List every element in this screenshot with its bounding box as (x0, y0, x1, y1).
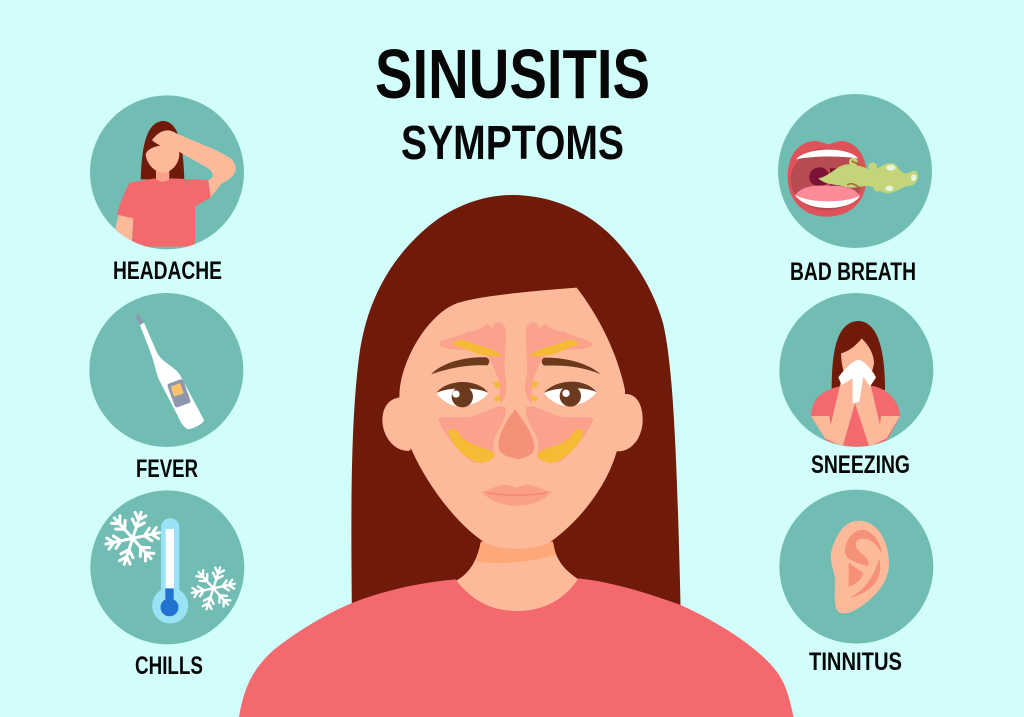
symptom: chills (90, 490, 244, 680)
icon: ear (779, 490, 933, 644)
hair (351, 195, 681, 625)
icon: thermometer and snowflakes (90, 490, 244, 644)
symptom: headache (90, 95, 244, 285)
sinuses: left side (438, 322, 507, 463)
snowflake large (99, 504, 167, 573)
label: chills: CHILLS (135, 652, 203, 680)
face (382, 288, 643, 549)
left eye (437, 382, 488, 407)
icon: digital thermometer (89, 293, 243, 447)
ears (382, 394, 643, 451)
icon: woman holding forehead (90, 95, 244, 249)
label: tinnitus: TINNITUS (809, 648, 902, 676)
snowflake small (186, 561, 241, 616)
title: SINUSITIS (375, 35, 650, 113)
eyebrows (431, 357, 601, 374)
odor cloud (818, 163, 918, 193)
face shape (399, 288, 625, 549)
neck (456, 542, 578, 617)
symptom: sneezing (779, 293, 933, 479)
right eye (544, 382, 597, 407)
label: bad breath: BAD BREATH (790, 258, 916, 286)
shirt (239, 578, 794, 717)
subtitle: SYMPTOMS (401, 117, 624, 170)
symptom: tinnitus (779, 490, 933, 676)
icon: woman with tissue (779, 293, 933, 447)
symptom: bad breath (778, 94, 932, 286)
lips (788, 141, 867, 217)
sinuses: right side (525, 322, 593, 463)
mouth (482, 484, 552, 506)
nose (498, 409, 534, 459)
label: headache: HEADACHE (113, 257, 222, 285)
main illustration: woman with sinusitis (239, 195, 794, 717)
symptom: fever (89, 293, 243, 483)
label: fever: FEVER (136, 455, 198, 483)
label: sneezing: SNEEZING (811, 451, 910, 479)
icon: mouth with odor cloud (778, 94, 932, 248)
